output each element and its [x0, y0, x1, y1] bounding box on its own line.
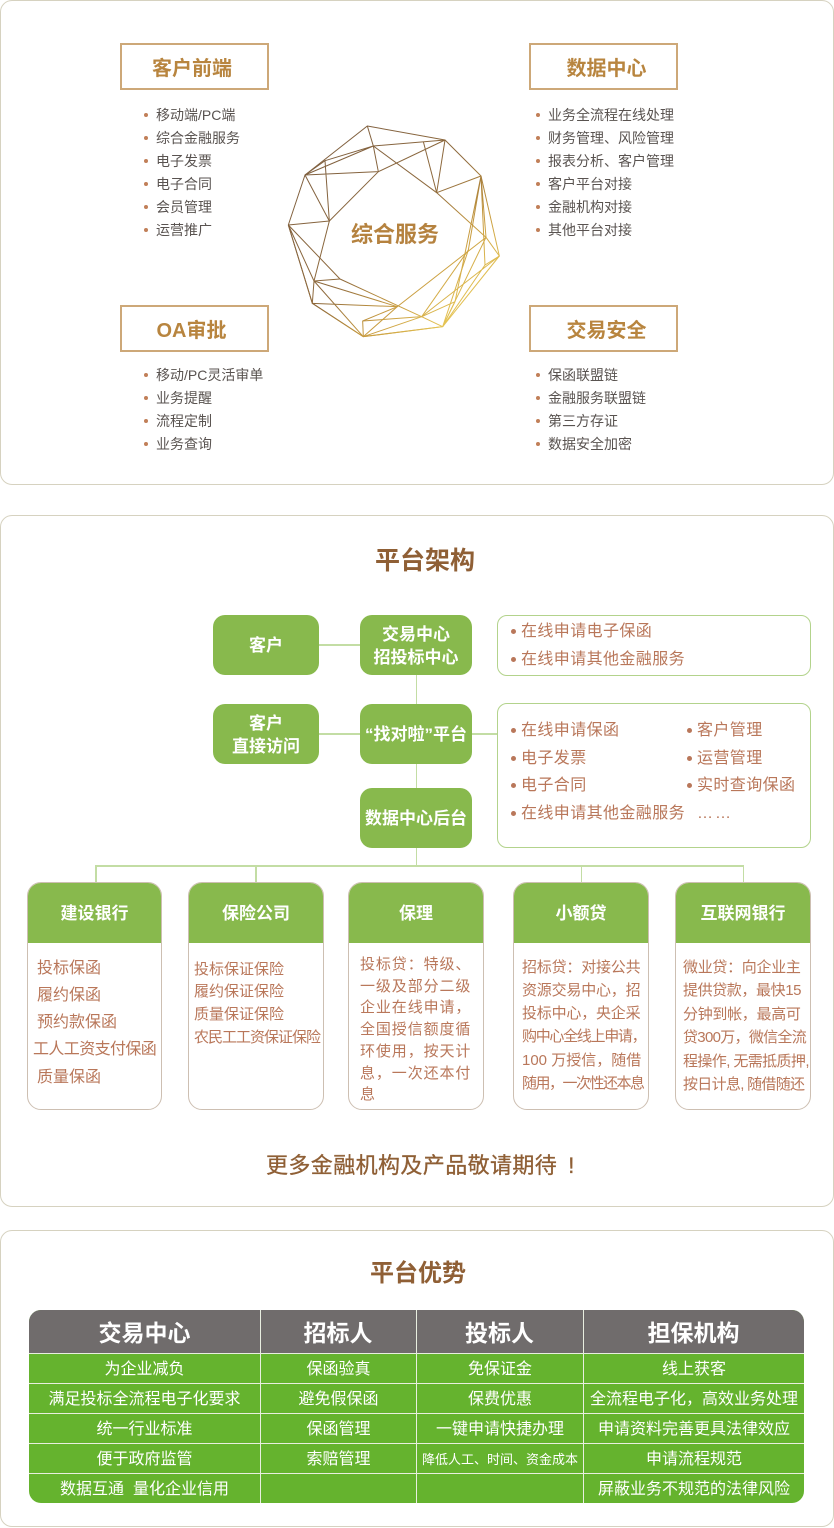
table: 平台优势	[29, 1310, 804, 1503]
card header	[26, 881, 163, 943]
node: 找对啦平台: “找对啦”平台	[365, 725, 467, 744]
card body: 环使用，按天计	[360, 1043, 471, 1060]
card body: 投标保函	[37, 960, 101, 976]
service: 在线申请其他金融服务: 在线申请其他金融服务	[521, 651, 685, 668]
card body: 100 万授信，随借	[522, 1052, 641, 1069]
list: 客户前端: 会员管理	[156, 199, 212, 215]
list: 交易安全: 金融服务联盟链	[548, 390, 646, 406]
card body: 贷300万，微信全流	[683, 1029, 806, 1046]
card body: 投标贷：特级、	[360, 956, 471, 973]
card body: 工人工资支付保函	[33, 1041, 156, 1058]
node: 找对啦平台	[360, 704, 472, 764]
service: 电子合同: 电子合同	[521, 777, 587, 794]
column: 投标人: 降低人工、时间、资金成本	[422, 1452, 578, 1467]
card body: 全国授信额度循	[360, 1021, 471, 1038]
card body: 投标保证保险	[194, 960, 284, 978]
column: 担保机构: 线上获客	[662, 1361, 726, 1378]
card: 保险公司	[188, 882, 324, 1110]
service: 在线申请电子保函: 在线申请电子保函	[521, 623, 652, 640]
column: 担保机构: 屏蔽业务不规范的法律风险	[598, 1481, 790, 1498]
service: 实时查询保函: 实时查询保函	[697, 777, 795, 794]
list: 交易安全: 数据安全加密	[548, 436, 632, 452]
list: 数据中心: 金融机构对接	[548, 199, 632, 215]
card body: 投标中心，央企采	[522, 1005, 640, 1022]
card body	[683, 958, 809, 1093]
card body: 提供贷款，最快15	[683, 982, 801, 999]
card body	[360, 956, 471, 1103]
node: 数据中心后台: 数据中心后台	[365, 809, 467, 828]
card header	[512, 881, 650, 943]
card: 建设银行	[27, 882, 162, 1110]
card body: 一级及部分二级	[360, 978, 471, 995]
card body: 质量保证保险	[194, 1006, 284, 1023]
list: OA审批: 业务查询	[156, 436, 212, 452]
node: 客户 直接访问: 客户	[249, 714, 283, 732]
card header: 互联网银行	[700, 904, 786, 923]
node: 客户	[213, 615, 319, 675]
list: 数据中心: 其他平台对接	[548, 222, 632, 238]
table header: 交易中心	[98, 1320, 190, 1346]
list: 数据中心: 客户平台对接	[548, 176, 632, 192]
list: 交易安全: 第三方存证	[548, 413, 618, 429]
service: 电子发票: 电子发票	[521, 750, 587, 767]
card body: 微业贷：向企业主	[683, 958, 801, 976]
heading: 客户前端: 客户前端	[152, 58, 232, 80]
heading: 交易安全	[529, 305, 678, 352]
column: 担保机构	[590, 1360, 798, 1498]
card body: 按日计息, 随借随还	[683, 1076, 804, 1093]
list: 客户前端: 运营推广	[156, 222, 212, 238]
column: 招标人: 保函验真	[306, 1361, 370, 1378]
list: OA审批: 业务提醒	[156, 390, 212, 406]
column: 招标人	[298, 1360, 378, 1468]
card body: 预约款保函	[37, 1014, 117, 1031]
list: 交易安全	[536, 367, 646, 452]
service: 在线申请保函: 在线申请保函	[521, 722, 619, 739]
column: 担保机构: 申请流程规范	[646, 1451, 742, 1468]
heading: 平台优势: 平台优势	[370, 1260, 466, 1287]
list: 客户前端: 电子合同	[156, 176, 212, 192]
service: 运营管理: 运营管理	[697, 750, 763, 767]
card body: 履约保证保险	[194, 983, 284, 1000]
column: 投标人: 一键申请快捷办理	[436, 1421, 564, 1438]
list: 数据中心: 财务管理、风险管理	[548, 130, 674, 146]
panel: 平台 services	[497, 703, 811, 848]
table header: 投标人	[465, 1320, 534, 1346]
connector lines	[95, 644, 744, 882]
card header: 保险公司	[222, 904, 290, 923]
column: 招标人: 保函管理	[306, 1421, 370, 1438]
column: 交易中心: 满足投标全流程电子化要求	[48, 1391, 240, 1408]
list: 数据中心	[536, 107, 674, 238]
card header	[347, 881, 485, 943]
column: 交易中心: 统一行业标准	[96, 1421, 192, 1438]
heading: 数据中心: 数据中心	[566, 58, 646, 80]
list: 数据中心: 报表分析、客户管理	[548, 153, 674, 169]
card body: 履约保函	[37, 987, 101, 1004]
node: 客户 直接访问: 直接访问	[232, 737, 300, 756]
column: 担保机构: 全流程电子化，高效业务处理	[590, 1391, 798, 1408]
column: 担保机构: 申请资料完善更具法律效应	[598, 1421, 790, 1438]
card body: 息	[360, 1086, 376, 1103]
list: 客户前端: 电子发票	[156, 153, 212, 169]
card header: 小额贷	[556, 904, 606, 923]
node: 交易中心 招投标中心	[360, 615, 472, 675]
table header: 招标人	[304, 1320, 372, 1346]
card: 小额贷	[513, 882, 649, 1110]
service: 在线申请其他金融服务: 在线申请其他金融服务	[521, 805, 685, 822]
card body: 程操作, 无需抵质押,	[683, 1052, 809, 1070]
column: 交易中心: 为企业减负	[104, 1361, 184, 1378]
list: 客户前端: 移动端/PC端	[156, 107, 235, 123]
column: 交易中心: 便于政府监管	[96, 1451, 192, 1468]
heading: OA审批	[120, 305, 269, 352]
column: 交易中心	[48, 1360, 240, 1498]
panel: 交易中心 services	[497, 615, 811, 676]
heading: 交易安全: 交易安全	[566, 320, 646, 342]
card body: 企业在线申请，	[360, 999, 471, 1016]
heading: 综合服务: 综合服务	[351, 222, 439, 247]
card: 互联网银行	[675, 882, 811, 1110]
column: 投标人	[422, 1360, 578, 1467]
column: 招标人: 索赔管理	[306, 1451, 370, 1468]
table header	[29, 1310, 804, 1353]
card header: 建设银行	[60, 904, 128, 923]
card header	[187, 881, 325, 943]
card header: 保理	[399, 904, 433, 923]
node: 交易中心 招投标中心: 交易中心	[382, 624, 450, 644]
heading: 客户前端	[120, 43, 269, 90]
card body: 分钟到帐，最高可	[683, 1006, 801, 1022]
card body: 购中心全线上申请，	[522, 1028, 645, 1045]
column: 交易中心: 数据互通 量化企业信用	[60, 1481, 229, 1498]
node: 数据中心后台	[360, 788, 472, 848]
panel: 平台架构	[0, 515, 834, 1207]
panel: 综合服务	[0, 0, 834, 485]
column: 投标人: 保费优惠	[468, 1391, 532, 1408]
table header: 担保机构	[648, 1320, 740, 1346]
list: 数据中心: 业务全流程在线处理	[548, 107, 674, 123]
text: 更多金融机构及产品敬请期待: 更多金融机构及产品敬请期待 !	[266, 1153, 575, 1178]
column: 投标人: 免保证金	[468, 1361, 532, 1378]
node: 交易中心 招投标中心: 招投标中心	[374, 648, 458, 667]
list: OA审批: 流程定制	[156, 413, 212, 429]
card body	[194, 960, 321, 1046]
card body: 招标贷：对接公共	[522, 958, 640, 976]
ellipsis: ……	[697, 805, 733, 822]
node: 客户 直接访问	[213, 704, 319, 764]
service: 客户管理: 客户管理	[697, 722, 763, 739]
list: 客户前端: 综合金融服务	[156, 130, 240, 146]
list: OA审批: 移动/PC灵活审单	[156, 367, 263, 383]
node: 客户: 客户	[249, 636, 283, 655]
card body: 资源交易中心，招	[522, 982, 640, 999]
panel: 平台优势	[0, 1230, 834, 1527]
card body: 息，一次还本付	[360, 1065, 471, 1082]
heading: 数据中心	[529, 43, 678, 90]
card body	[33, 959, 156, 1086]
card body: 随用，一次性还本息	[522, 1075, 644, 1092]
heading: 平台架构: 平台架构	[375, 547, 475, 575]
card body: 质量保函	[37, 1069, 101, 1086]
card header	[674, 881, 812, 943]
column: 招标人: 避免假保函	[298, 1391, 378, 1408]
list: OA审批	[144, 367, 263, 452]
list: 交易安全: 保函联盟链	[548, 367, 618, 383]
heading: OA审批: OA审批	[156, 320, 226, 342]
icon: geometric polygon diagram	[288, 126, 500, 338]
card: 保理	[348, 882, 484, 1110]
list: 客户前端	[144, 107, 240, 238]
card body	[522, 958, 645, 1092]
card body: 农民工工资保证保险	[194, 1029, 320, 1046]
